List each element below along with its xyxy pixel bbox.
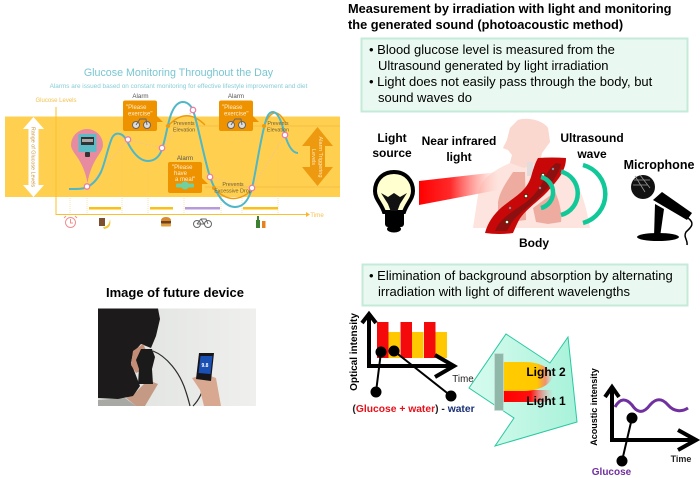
main heading: [348, 1, 672, 32]
alarm level lines: [165, 126, 340, 187]
time label: Time: [452, 374, 474, 385]
prevented arcs: [168, 113, 285, 199]
y label: Optical intensity: [349, 313, 360, 391]
ultrasound arcs: [541, 165, 605, 223]
prevention labels: Excessive Drop: [214, 188, 252, 194]
text box: ultrasound explanation: • Blood glucose level is measured from the: [369, 42, 615, 57]
label: light source: source: [372, 146, 412, 160]
trachea: [527, 162, 533, 176]
icon: light bulb: [375, 172, 413, 232]
alarm 3: [168, 155, 208, 193]
icon: candy: [176, 182, 194, 190]
alarm 1: "Please: [126, 105, 147, 111]
icon: drinks: [256, 216, 266, 228]
acoustic intensity chart: [589, 368, 696, 478]
axis label: glucose levels: Glucose Levels: [35, 98, 77, 104]
lungs: [498, 172, 561, 226]
label: near infrared light: light: [446, 150, 472, 164]
label: ultrasound wave: wave: [576, 147, 607, 161]
light 1 beam: [503, 390, 553, 402]
callout line: [618, 414, 636, 466]
optical intensity chart: [349, 313, 475, 415]
phone: [196, 353, 214, 381]
time arrowhead: [306, 212, 310, 217]
glucose monitoring chart: [5, 67, 340, 229]
glucose curve: [69, 102, 298, 207]
alarm 2: [219, 93, 259, 131]
orange trigger arrow: [302, 127, 333, 186]
shirt: [98, 398, 136, 406]
body silhouette: [473, 119, 590, 228]
alternating bars: [377, 322, 447, 358]
prevention labels: Prevents: [222, 182, 244, 188]
alarm 3: a meal": [175, 177, 195, 183]
activity bars: [89, 207, 278, 210]
axes: [605, 387, 696, 450]
label: ultrasound wave: Ultrasound: [560, 131, 624, 145]
dotted guide lines: [70, 140, 278, 214]
range label: Range of Glucose Levels: [30, 127, 36, 187]
formula: (Glucose + water) - water: [352, 404, 475, 415]
prevention labels: [173, 121, 289, 194]
alarm 2: exercise": [224, 112, 248, 118]
purple signal: [615, 400, 688, 411]
axis label: time: Time: [310, 212, 324, 219]
label: light source: [372, 131, 412, 160]
hair: [98, 308, 160, 399]
icon: glucose monitor pin: [71, 129, 103, 183]
white range arrow: [23, 117, 44, 197]
icon: alarm clock: [64, 216, 77, 228]
photo of future device: [98, 308, 256, 406]
label: near infrared light: [422, 134, 496, 164]
prevention labels: Prevents: [173, 121, 195, 127]
prevented curve dotted: [87, 110, 285, 188]
photoacoustic diagram: [372, 119, 694, 250]
text box: background absorption: irradiation with light of different wavelengths: [378, 284, 630, 299]
text box: ultrasound explanation: sound waves do: [378, 90, 472, 105]
alarm 3: "Please: [172, 165, 193, 171]
callout lines: [372, 346, 456, 400]
trigger label: Alarm Triggering: [317, 136, 323, 178]
main heading: the generated sound (photoacoustic method): [348, 17, 623, 32]
cable: [153, 351, 205, 406]
prevention labels: Elevation: [173, 128, 195, 134]
trigger label: Levels: [310, 149, 316, 165]
alarm 1: [123, 93, 163, 131]
icon: bicycle: [194, 219, 212, 228]
text box: background absorption: • Elimination of background absorption by alternating: [369, 268, 673, 283]
light 2 beam: [503, 362, 553, 391]
icon: microphone: [631, 175, 692, 245]
alarm 1: Alarm: [132, 93, 149, 100]
time label: Time: [671, 454, 691, 464]
pink markers: [84, 107, 288, 191]
y label: Acoustic intensity: [589, 368, 599, 446]
alarm 2: Alarm: [228, 93, 244, 100]
blood vessel: [485, 158, 566, 234]
main heading: Measurement by irradiation with light and monitoring: [348, 1, 672, 16]
headset: [136, 349, 155, 384]
label: microphone: Microphone: [624, 158, 694, 172]
phone reading: 9.8: [202, 363, 209, 369]
plate: [494, 354, 504, 410]
ear: [131, 344, 146, 373]
label: ultrasound wave: [560, 131, 624, 161]
glucose label: Glucose: [592, 467, 632, 478]
text box: ultrasound explanation: [362, 38, 688, 112]
neck: [126, 380, 158, 406]
chart title: Glucose Monitoring Throughout the Day: [84, 67, 274, 79]
glucose range band: [5, 116, 340, 197]
text box: ultrasound explanation: Ultrasound generated by light irradiation: [378, 58, 609, 73]
future device heading: Image of future device: [106, 285, 244, 300]
alarm 3: have: [174, 171, 188, 177]
hand: [192, 374, 221, 406]
alarm 1: exercise": [128, 112, 152, 118]
prevention labels: Elevation: [267, 128, 289, 134]
label: body: Body: [519, 236, 549, 250]
teal arrow with light beams: [469, 334, 577, 446]
phone screen: [198, 356, 212, 374]
label: light 1: Light 1: [526, 394, 566, 408]
alarm 2: "Please: [222, 105, 243, 111]
axes: [362, 314, 454, 377]
chart axes: [56, 107, 306, 214]
prevention labels: Prevents: [267, 121, 289, 127]
label: light source: Light: [377, 131, 407, 145]
head tint: [503, 119, 550, 168]
alarm 3: Alarm: [177, 155, 193, 162]
icon: coffee and banana: [99, 218, 110, 229]
near infrared beam: [419, 172, 498, 205]
label: near infrared light: Near infrared: [422, 134, 496, 148]
chart subtitle: Alarms are issued based on constant monitoring for effective lifestyle improvement and diet: [50, 83, 308, 90]
text box: ultrasound explanation: • Light does not easily pass through the body, but: [369, 74, 653, 89]
label: light 2: Light 2: [526, 365, 566, 379]
icon: burger: [161, 217, 171, 226]
text box: background absorption: [362, 264, 688, 306]
prevented markers: [166, 124, 266, 190]
